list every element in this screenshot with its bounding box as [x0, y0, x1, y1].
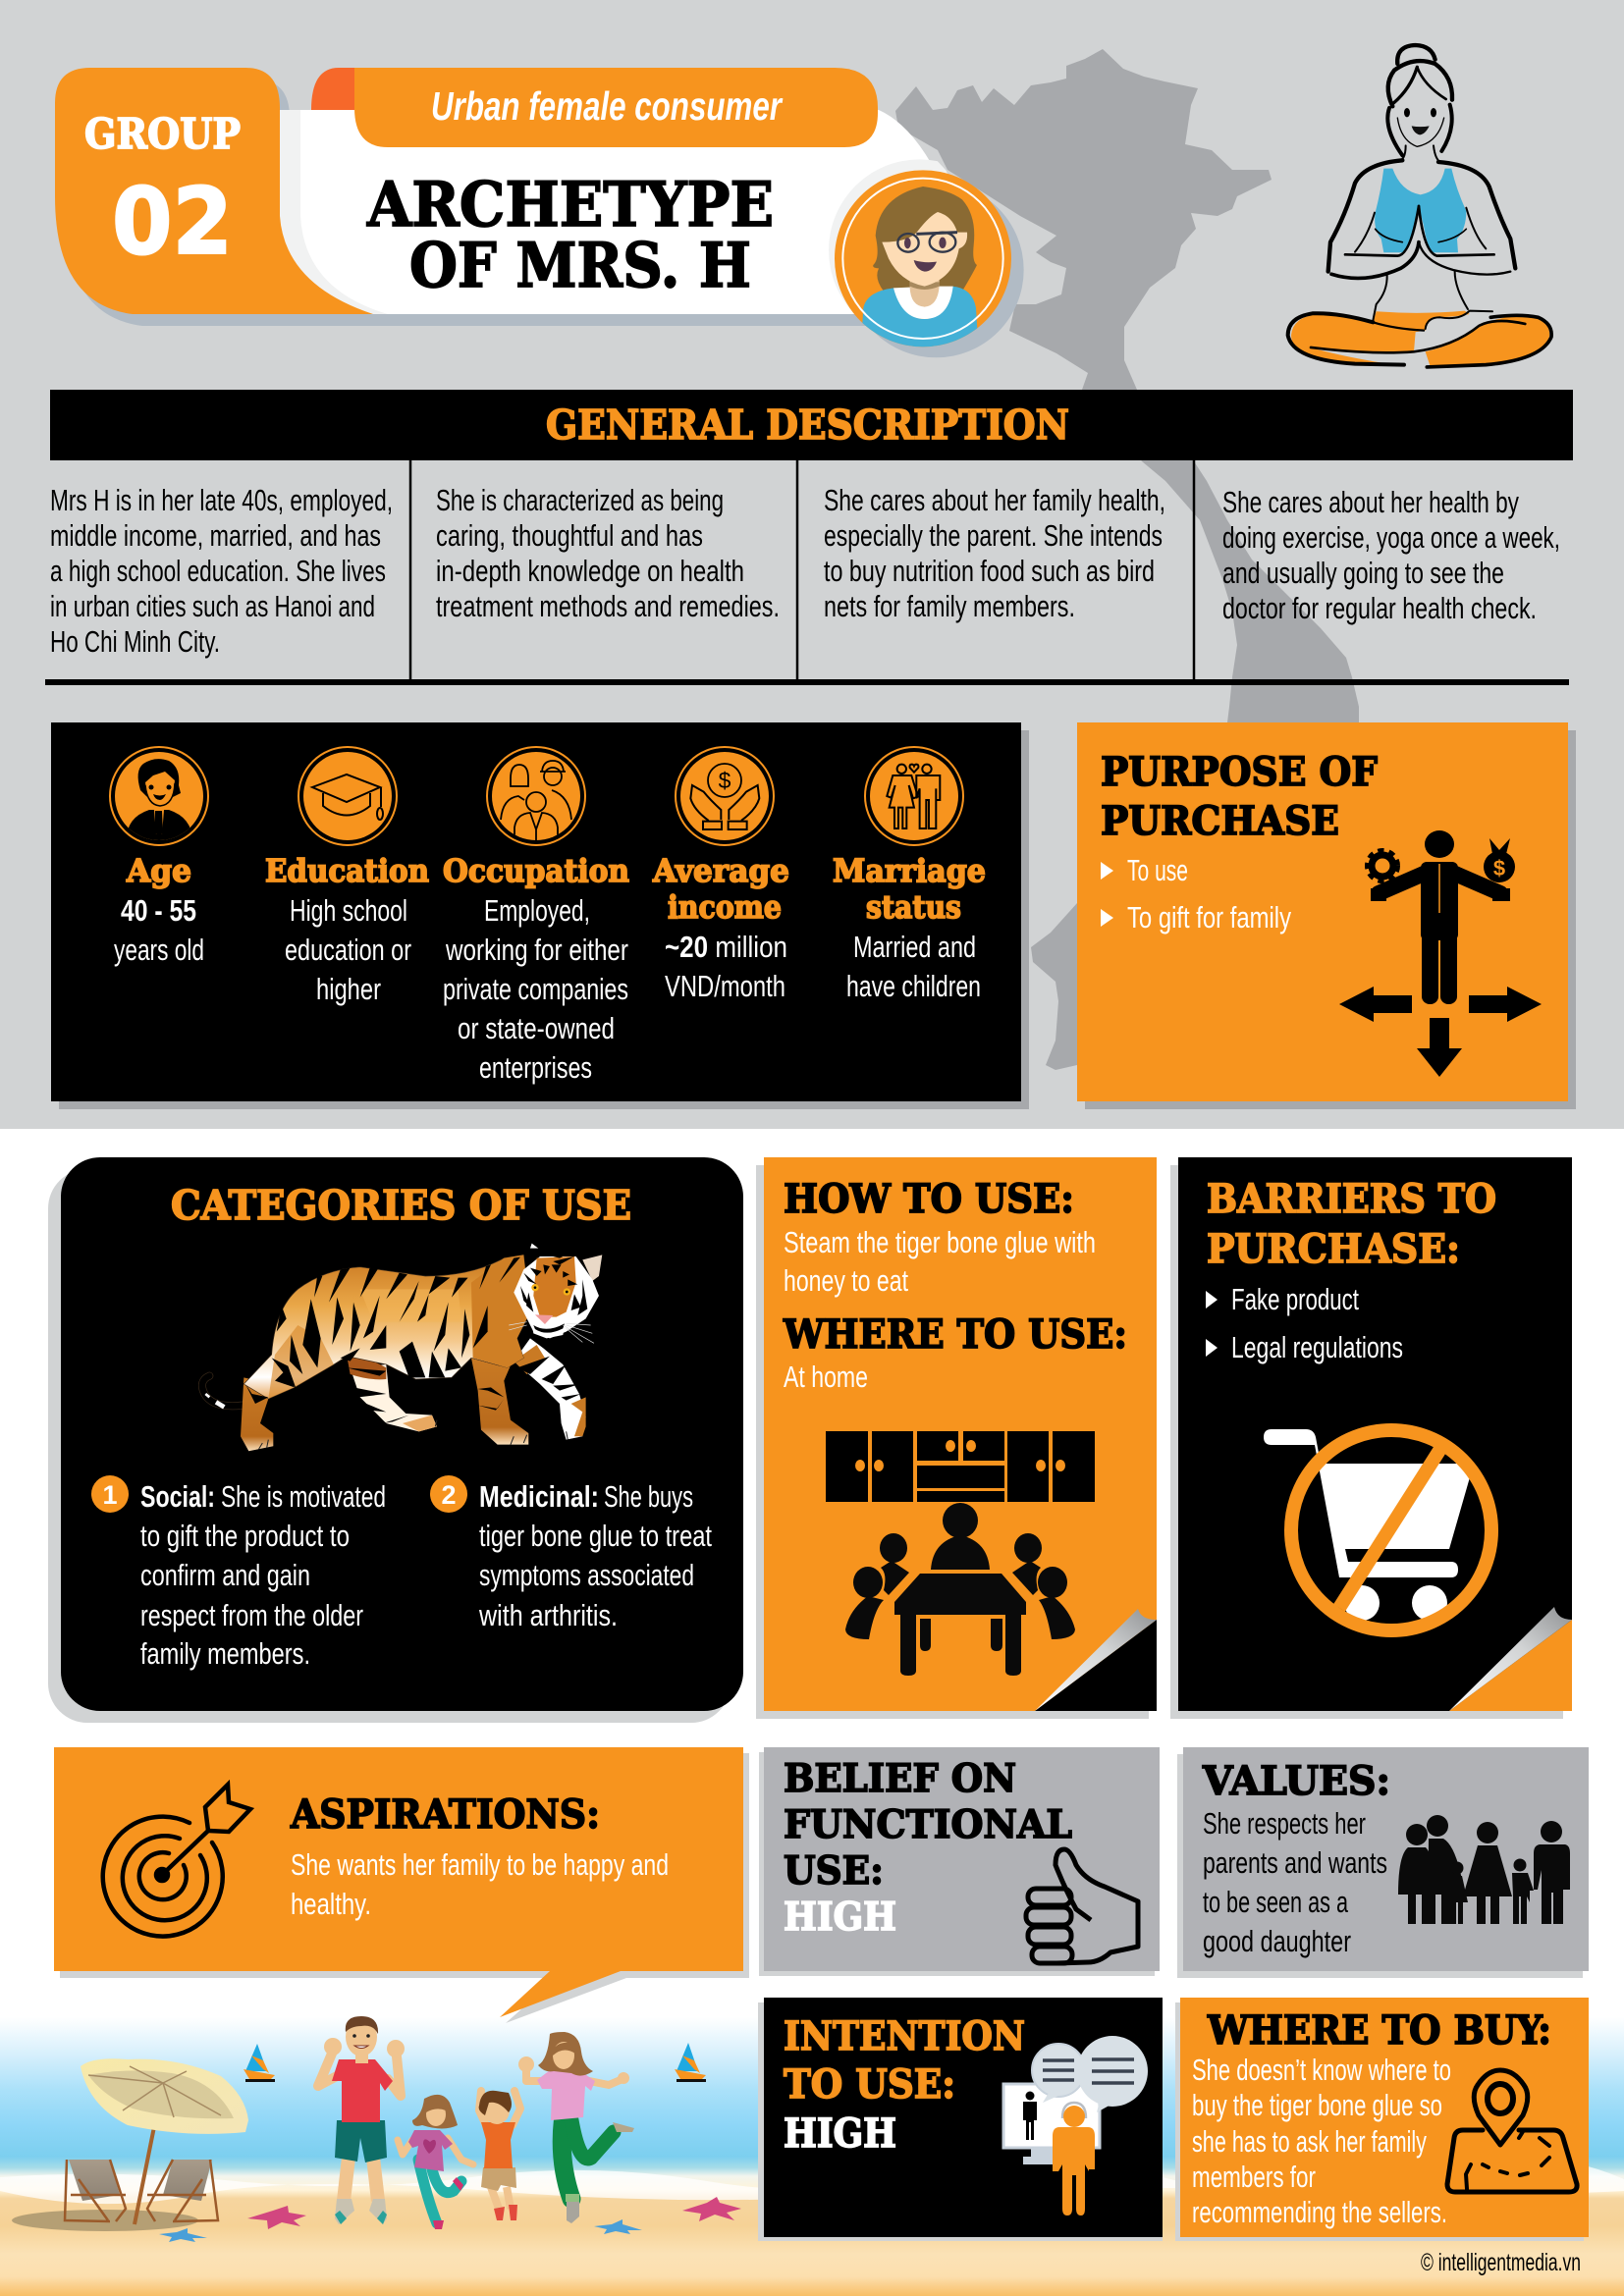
description column 4: and usually going to see the: [1222, 556, 1504, 590]
boy: [479, 2091, 520, 2220]
column: marriage: have children: [846, 969, 981, 1003]
purpose bullets: To gift for family: [1127, 900, 1291, 934]
ribbon: [354, 68, 878, 147]
column: occupation: [443, 852, 629, 1085]
barriers bullets: [1206, 1282, 1403, 1364]
column: education: education or: [285, 933, 411, 967]
column: age: Age: [126, 852, 191, 889]
item 1: social: [91, 1475, 386, 1671]
description column 1: middle income, married, and has: [50, 518, 381, 553]
belief heading: [784, 1756, 1072, 1894]
belief heading: USE:: [784, 1848, 884, 1894]
where to use text: At home: [784, 1360, 868, 1394]
where to buy text: she has to ask her family: [1192, 2124, 1427, 2159]
group label: GROUP: [84, 110, 241, 158]
how to use text: Steam the tiger bone glue with: [784, 1225, 1096, 1259]
values text: [1203, 1806, 1387, 1958]
belief rating: HIGH: [784, 1895, 896, 1940]
barriers bullets: Fake product: [1231, 1282, 1359, 1316]
values text: good daughter: [1203, 1924, 1351, 1958]
item 1: social: Social:: [140, 1479, 215, 1514]
values text: to be seen as a: [1203, 1885, 1349, 1919]
description column 2: She is characterized as being: [436, 483, 724, 517]
aspirations text: [291, 1847, 669, 1921]
where to use heading: WHERE TO USE:: [783, 1311, 1127, 1358]
background: grey top band: [0, 0, 1624, 1129]
mother: [518, 2032, 634, 2223]
description column 3: especially the parent. She intends: [824, 518, 1163, 553]
where to buy text: members for: [1192, 2160, 1316, 2194]
panel: belief on functional use: [759, 1747, 1160, 1976]
page curl: [1449, 1607, 1572, 1711]
where to buy text: She doesn’t know where to: [1192, 2053, 1451, 2087]
group badge: [55, 68, 373, 314]
beach family scene: [0, 2016, 1624, 2242]
column: occupation: Employed,: [484, 893, 590, 928]
purpose bullets: To use: [1127, 853, 1188, 887]
panel: purpose of purchase: [1077, 722, 1576, 1109]
icon: crossed-out cart: [1264, 1429, 1491, 1630]
where to buy text: recommending the sellers.: [1192, 2195, 1447, 2229]
icon: map pin: [1447, 2070, 1577, 2192]
map of Vietnam silhouette: [895, 49, 1359, 1070]
column: age: [114, 852, 204, 967]
description column 3: She cares about her family health,: [824, 483, 1165, 517]
description column 1: Ho Chi Minh City.: [50, 624, 220, 659]
panel: demographics: [51, 722, 1029, 1109]
aspirations text: healthy.: [291, 1887, 371, 1921]
column: income: income: [668, 888, 782, 926]
column: occupation: enterprises: [479, 1050, 592, 1085]
header banner: [55, 68, 947, 326]
title line 2: OF MRS. H: [409, 229, 751, 301]
speech bubble shadow: [60, 1753, 749, 2023]
panel: aspirations: [54, 1747, 749, 2023]
barriers heading: BARRIERS TO: [1207, 1176, 1496, 1222]
column: marriage: Marriage: [833, 852, 986, 889]
umbrella and chairs: [12, 2058, 248, 2231]
description column 4: [1222, 485, 1560, 625]
column: occupation: Occupation: [443, 852, 629, 889]
avatar of Mrs H: [829, 159, 1024, 357]
item 1: social: family members.: [140, 1636, 310, 1671]
column: income: Average: [652, 852, 789, 889]
column: marriage: Married and: [853, 930, 976, 964]
item 2: medicinal: with arthritis.: [478, 1598, 618, 1632]
section: general description: [45, 390, 1573, 685]
icon: family silhouette: [1398, 1815, 1570, 1924]
item 2: medicinal: She buys: [604, 1479, 693, 1514]
column: occupation: or state-owned: [458, 1011, 615, 1045]
icon: family at table: [845, 1503, 1075, 1676]
ribbon fold: [311, 68, 354, 110]
column: income: VND/month: [665, 969, 785, 1003]
icon: thumbs up: [1026, 1849, 1138, 1963]
column: education: [265, 852, 429, 1006]
icon: education: [298, 747, 397, 845]
description column 1: a high school education. She lives: [50, 554, 386, 588]
column: income: ~20 million: [665, 930, 787, 964]
icon: income: [676, 747, 774, 845]
barriers heading: [1207, 1176, 1496, 1272]
girl: [398, 2095, 473, 2229]
description column 1: Mrs H is in her late 40s, employed,: [50, 483, 393, 517]
item 2: medicinal: [430, 1475, 712, 1632]
how to use heading: HOW TO USE:: [784, 1176, 1074, 1222]
icon: marriage: [865, 747, 963, 845]
item 2: medicinal: Medicinal:: [479, 1479, 599, 1514]
icon: person with directions: [1339, 830, 1542, 1077]
column: education: High school: [290, 893, 407, 928]
column: age: 40 - 55: [121, 893, 196, 928]
group number: 02: [112, 169, 233, 276]
panel: values: [1177, 1747, 1589, 1978]
description column 2: caring, thoughtful and has: [436, 518, 703, 553]
column: occupation: private companies: [443, 972, 628, 1006]
banner shadow: [65, 80, 884, 326]
panel: categories of use: [48, 1157, 743, 1723]
scroll inner edge: [280, 110, 388, 314]
purpose heading: PURPOSE OF: [1101, 749, 1378, 795]
subtitle: Urban female consumer: [431, 83, 784, 129]
aspirations text: She wants her family to be happy and: [291, 1847, 669, 1882]
values text: parents and wants: [1203, 1845, 1387, 1880]
values heading: VALUES:: [1202, 1758, 1390, 1804]
white scroll: [280, 110, 947, 314]
barriers bullets: Legal regulations: [1231, 1330, 1403, 1364]
where to buy text: [1192, 2053, 1451, 2229]
item 1: social: to gift the product to: [140, 1519, 350, 1553]
intention heading: [784, 2013, 1025, 2108]
how to use text: [784, 1225, 1096, 1298]
column: occupation: working for either: [445, 933, 628, 967]
item 2: medicinal: symptoms associated: [479, 1558, 694, 1592]
belief heading: FUNCTIONAL: [784, 1802, 1072, 1847]
page curl: [1035, 1609, 1157, 1711]
description heading: GENERAL DESCRIPTION: [546, 401, 1069, 449]
description column 1: in urban cities such as Hanoi and: [50, 589, 375, 623]
description header bar: [50, 390, 1573, 460]
surf foam: [0, 2158, 1624, 2204]
intention heading: INTENTION: [784, 2013, 1025, 2059]
intention rating: HIGH: [784, 2110, 896, 2157]
item 2: medicinal: 2: [441, 1480, 457, 1510]
column: education: Education: [265, 852, 429, 889]
column: age: years old: [114, 933, 204, 967]
icon: kitchen cabinets: [826, 1431, 1095, 1502]
values text: She respects her: [1203, 1806, 1366, 1841]
categories heading: CATEGORIES OF USE: [171, 1182, 631, 1229]
column: income: [652, 852, 789, 1003]
icon: income: $: [719, 768, 731, 793]
description column 1: [50, 483, 393, 659]
aspirations heading: ASPIRATIONS:: [290, 1791, 600, 1838]
where to buy text: buy the tiger bone glue so: [1192, 2088, 1442, 2122]
yoga woman illustration: [1288, 45, 1551, 367]
where to buy heading: WHERE TO BUY:: [1207, 2007, 1551, 2054]
description column 2: [436, 483, 780, 623]
purpose heading: [1101, 749, 1378, 844]
tiger illustration: [202, 1237, 602, 1451]
speech bubble: [54, 1747, 743, 2017]
item 1: social: confirm and gain: [140, 1558, 310, 1592]
description column 3: to buy nutrition food such as bird: [824, 554, 1155, 588]
intention heading: TO USE:: [784, 2061, 955, 2108]
item 2: medicinal: tiger bone glue to treat: [479, 1519, 712, 1553]
icon: age: [110, 747, 208, 845]
item 1: social: She is motivated: [221, 1479, 386, 1514]
item 1: social: respect from the older: [140, 1598, 363, 1632]
panel: intention to use: [758, 1998, 1163, 2241]
icon: consulting screen: [1003, 2036, 1148, 2216]
father: [318, 2016, 405, 2224]
icon: occupation: [487, 747, 585, 845]
how to use text: honey to eat: [784, 1263, 908, 1298]
description column 2: treatment methods and remedies.: [436, 589, 780, 623]
barriers heading: PURCHASE:: [1207, 1226, 1460, 1272]
background: beach scene gradient: [0, 2017, 1624, 2296]
description column 3: [824, 483, 1165, 623]
icon: person with directions: $: [1493, 856, 1505, 881]
description column 3: nets for family members.: [824, 589, 1075, 623]
panel: barriers to purchase: [1170, 1157, 1572, 1719]
panel: how and where to use: [756, 1157, 1157, 1719]
item 1: social: 1: [102, 1480, 118, 1510]
column: marriage: status: [866, 888, 961, 926]
icon: target: [103, 1785, 250, 1937]
description column 2: in-depth knowledge on health: [436, 554, 744, 588]
sailboat left: [244, 2044, 275, 2082]
description column 4: She cares about her health by: [1222, 485, 1519, 519]
column: marriage: [833, 852, 986, 1003]
belief heading: BELIEF ON: [784, 1756, 1016, 1801]
starfish: [159, 2197, 741, 2242]
purpose heading: PURCHASE: [1101, 798, 1339, 844]
sailboat right: [675, 2043, 706, 2082]
title line 1: ARCHETYPE: [366, 168, 774, 240]
panel: where to buy: [1175, 1998, 1589, 2241]
purpose bullets: [1101, 853, 1291, 934]
column: education: higher: [316, 972, 381, 1006]
